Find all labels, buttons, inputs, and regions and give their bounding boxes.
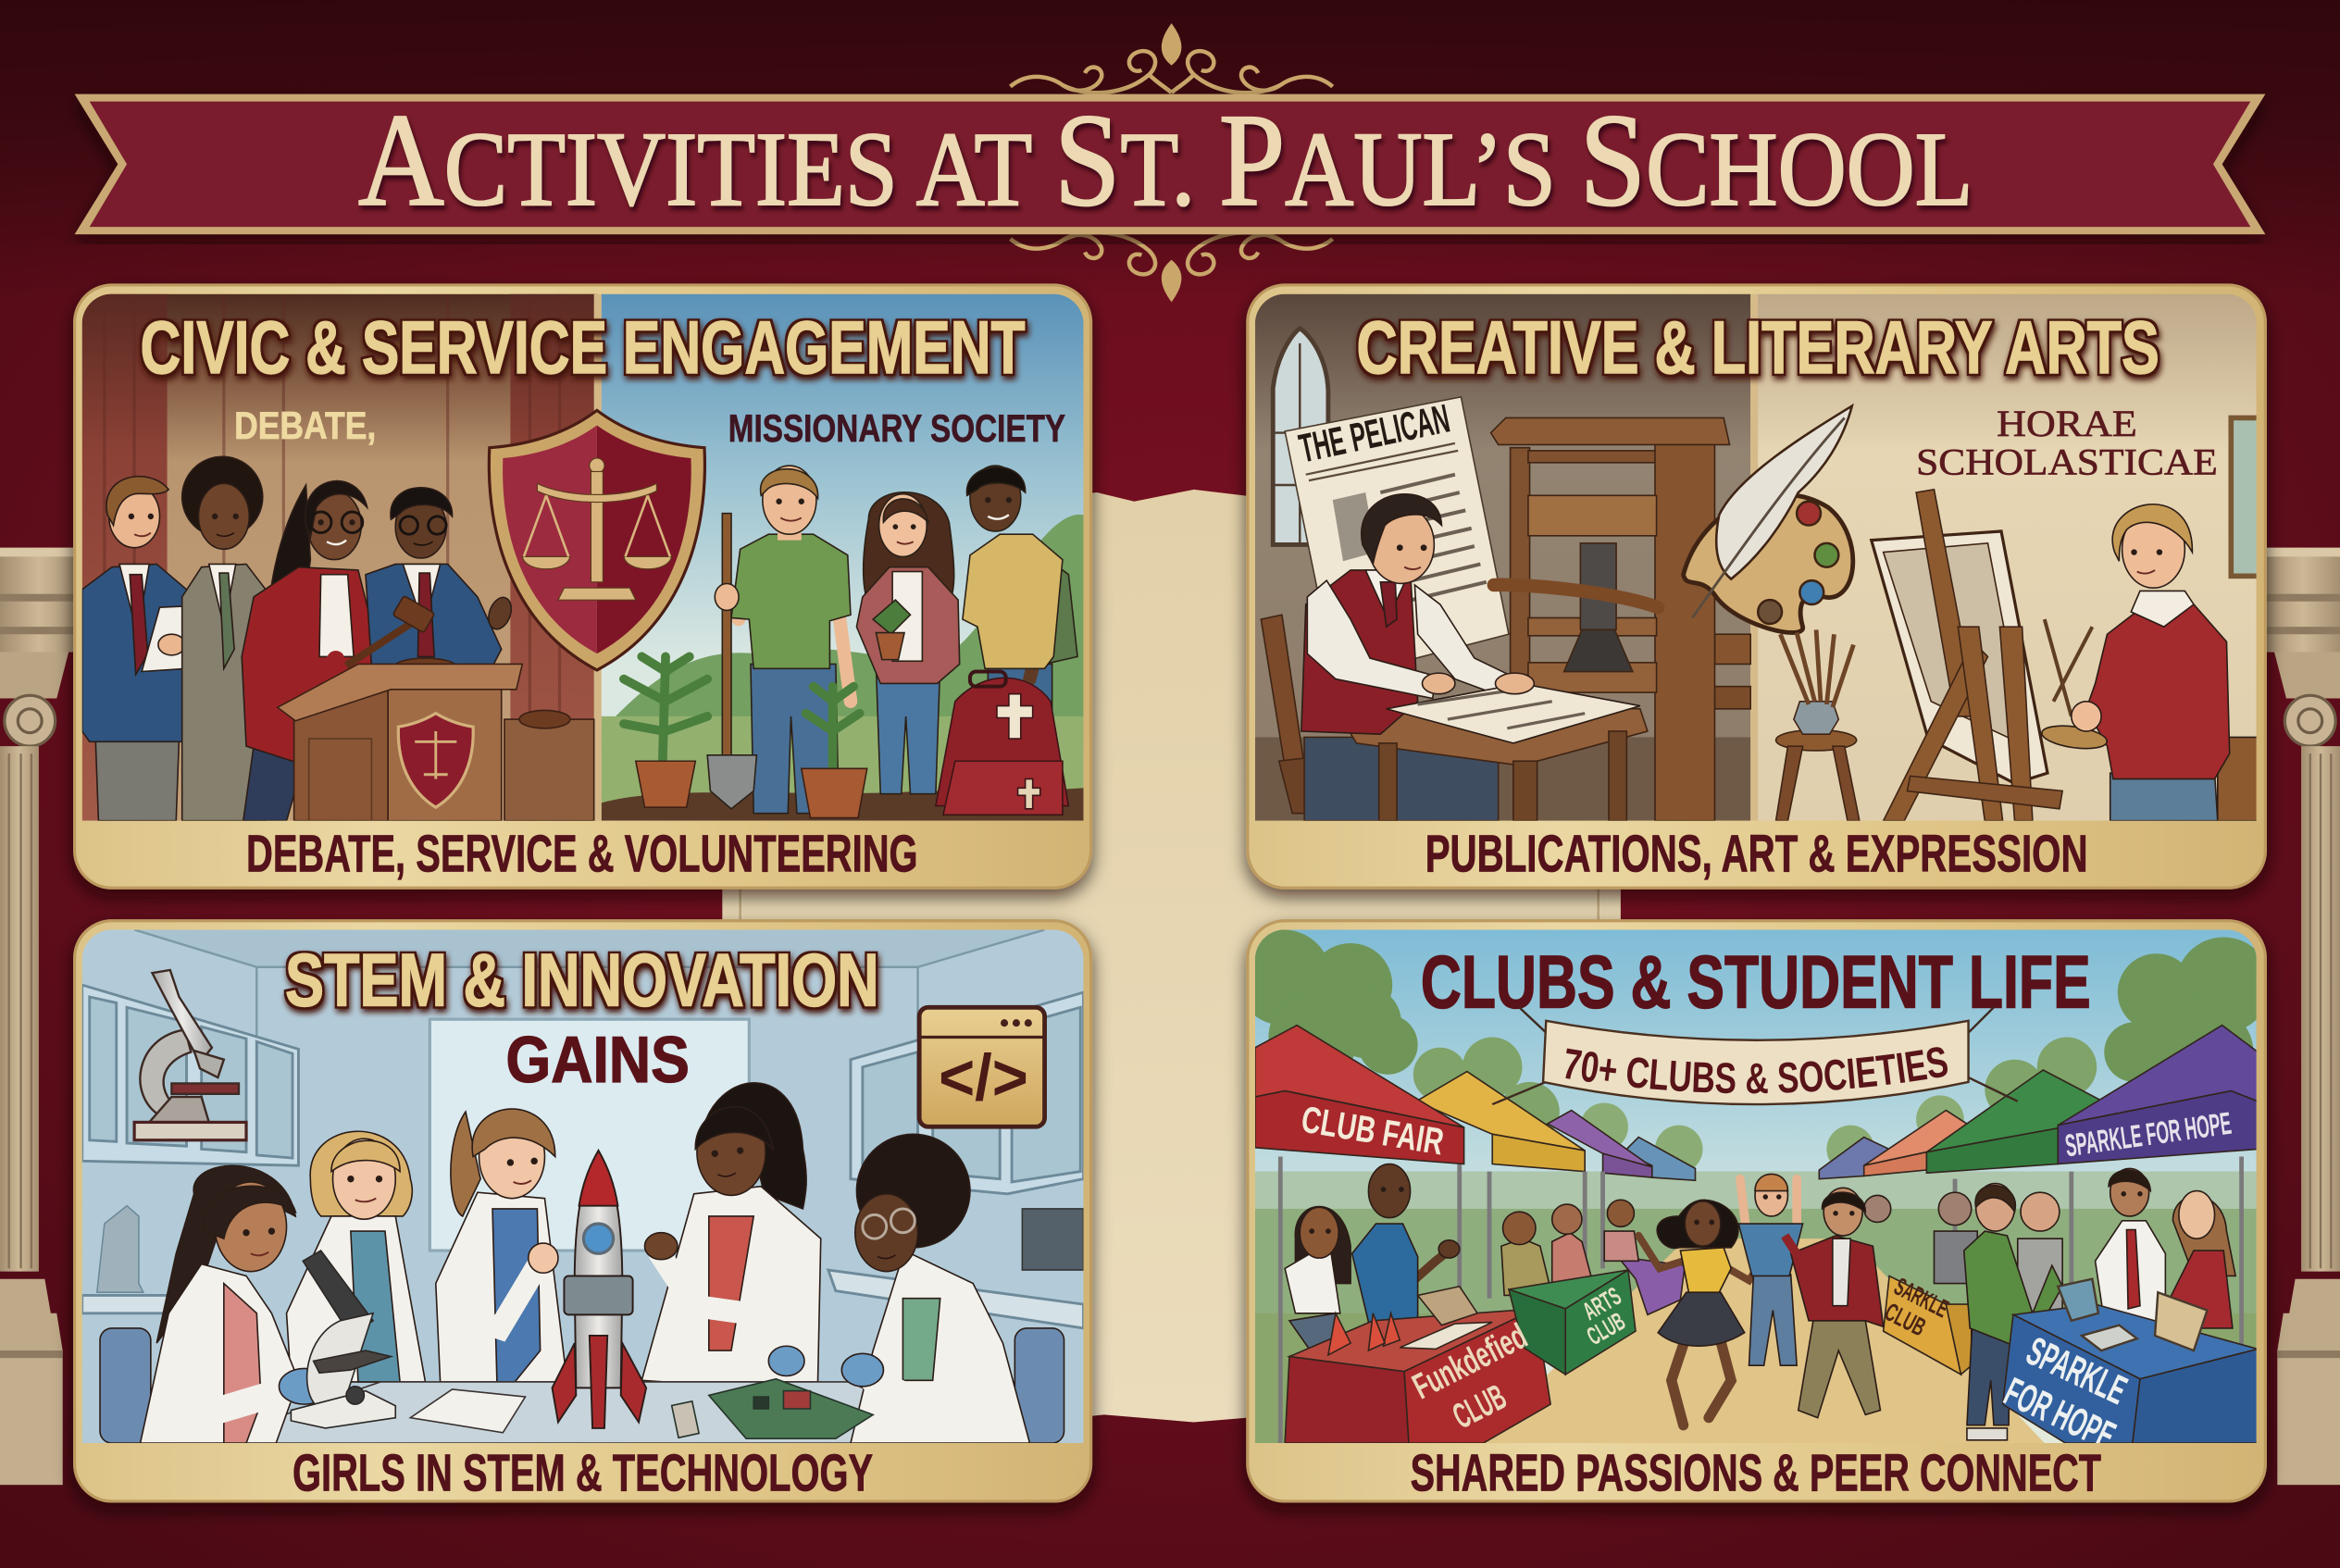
- heading: STEM & INNOVATION: [285, 940, 879, 1023]
- lab table: [202, 1382, 970, 1443]
- panel: clubs and student life: [1233, 913, 2279, 1520]
- desk with chair: [1261, 615, 1648, 821]
- caption strip text: DEBATE, SERVICE & VOLUNTEERING: [246, 825, 918, 883]
- heading: CLUBS & STUDENT LIFE: [1421, 940, 2091, 1024]
- hanging banner: 70+ clubs and societies: [1492, 1007, 2018, 1105]
- person: debater with paper: [81, 476, 187, 821]
- framed painting: [2231, 417, 2261, 576]
- easel with canvas: [1872, 490, 2062, 821]
- person: jumping boy: [1738, 1174, 1803, 1365]
- lectern and gavel: [278, 595, 594, 821]
- background equipment: [97, 1206, 1083, 1292]
- icon: potted plants: [624, 656, 867, 818]
- table: funkdefied club: [1285, 1287, 1550, 1443]
- person: blonde girl: [287, 1131, 425, 1382]
- icon: code window: </>: [939, 1041, 1028, 1114]
- icon: code window: [919, 1007, 1045, 1126]
- left stone column: [0, 548, 78, 1485]
- title text: ACTIVITIES AT ST. PAUL’S SCHOOL: [358, 87, 1973, 234]
- person: student writing: [1301, 494, 1640, 743]
- tent: far tents left: [1416, 1072, 1696, 1180]
- person: girl with microscope: [100, 1165, 330, 1443]
- table: arts club: [1509, 1270, 1636, 1375]
- person: dancing girl: [1638, 1200, 1767, 1425]
- icon: small lectern shield: [398, 714, 473, 807]
- person: fair host man: [1352, 1164, 1460, 1328]
- icon: bench microscope: [291, 1251, 395, 1428]
- person: girl with braids: [641, 1083, 821, 1382]
- person: volunteer in red hoodie: [2170, 1191, 2235, 1328]
- tent: far tents right: [1819, 1070, 2103, 1179]
- art boards on blue table: [2058, 1279, 2208, 1350]
- hanging banner: 70+ clubs and societies: 70+ CLUBS & SOCIETIES: [1565, 1047, 1948, 1094]
- icon: rocket: [553, 1151, 646, 1428]
- person: boy in green hoodie: [1964, 1184, 2062, 1440]
- label: horae scholasticae: [1916, 403, 2218, 483]
- label: arts club: ARTS: [1578, 1281, 1625, 1325]
- person: girl with glasses: [768, 1134, 1064, 1443]
- person: man in maroon blazer: [1785, 1188, 1884, 1418]
- people: booth visitors left: [1501, 1200, 1638, 1295]
- table: sparkle for hope blue: [2003, 1304, 2258, 1443]
- icon: red backpack: [936, 672, 1068, 815]
- stool with brush jar: [1776, 629, 1860, 821]
- heading: CIVIC & SERVICE ENGAGEMENT: [141, 306, 1026, 390]
- person: volunteer with tie: [2096, 1168, 2165, 1321]
- label: sparkle for hope table: SPARKLE: [2020, 1329, 2134, 1413]
- tent poles: [1280, 1156, 2242, 1443]
- newspaper: the pelican: THE PELICAN: [1296, 396, 1453, 472]
- center parchment scroll: [722, 490, 1621, 1422]
- person: speaker in red blazer: [242, 481, 376, 821]
- panel: civic and service engagement: [75, 285, 1091, 888]
- icon: gothic window: [1273, 329, 1328, 544]
- label: funkdefied club: Funkdefied: [1406, 1316, 1534, 1407]
- icon: wall microscope: [134, 970, 246, 1140]
- scene: club fair: [1236, 929, 2272, 1460]
- ornament: bottom flourish: [1010, 232, 1333, 298]
- label: sparkle for hope table: FOR HOPE: [1998, 1370, 2122, 1460]
- icon: circuit board: [672, 1379, 873, 1438]
- person: volunteer in yellow shirt: [963, 466, 1077, 761]
- caption strip text: GIRLS IN STEM & TECHNOLOGY: [292, 1444, 873, 1502]
- trees: [1236, 929, 2272, 1173]
- label: club fair: CLUB FAIR: [1299, 1099, 1447, 1164]
- person: fair host girl: [1285, 1207, 1350, 1350]
- people: booth visitors right: [1864, 1192, 2062, 1321]
- newspaper: the pelican: [1285, 396, 1509, 679]
- person: debater in grey suit: [182, 456, 266, 821]
- label: sarkle club: SARKLE: [1890, 1272, 1953, 1323]
- scene: debate and service: [82, 294, 1083, 821]
- table: purple: [1618, 1257, 1685, 1314]
- scene: science lab: [82, 929, 1083, 1443]
- caption strip text: PUBLICATIONS, ART & EXPRESSION: [1425, 825, 2088, 883]
- panel: creative and literary arts: [1248, 285, 2265, 888]
- tent: club fair red: [1255, 1026, 1464, 1164]
- label: horae scholasticae: SCHOLASTICAE: [1916, 442, 2218, 483]
- label: arts club: CLUB: [1582, 1306, 1630, 1350]
- title banner: [75, 87, 2265, 234]
- label: sarkle club: CLUB: [1880, 1297, 1931, 1341]
- icon: shield with scales: [489, 410, 704, 670]
- person: volunteer with plant: [856, 492, 960, 794]
- label: funkdefied club: CLUB: [1447, 1377, 1512, 1437]
- label: gains: GAINS: [506, 1024, 690, 1097]
- person: volunteer with shovel: [707, 466, 851, 814]
- scene: press and studio: [1255, 294, 2261, 821]
- icon: notepad: [410, 1389, 526, 1433]
- ornament: top flourish: [1010, 27, 1333, 93]
- table: sparkle club yellow: [1884, 1276, 1972, 1375]
- icon: palette and quill: [1684, 406, 1853, 632]
- label: horae scholasticae: HORAE: [1997, 403, 2137, 444]
- tent: sparkle for hope purple: [2058, 1026, 2258, 1164]
- person: girl with ponytail: [436, 1109, 567, 1382]
- label: arts club: [1570, 1281, 1637, 1350]
- label: sarkle club: [1877, 1272, 1953, 1347]
- label: missionary society: MISSIONARY SOCIETY: [728, 406, 1065, 450]
- label: funkdefied club: [1406, 1316, 1554, 1447]
- person: debater with glasses: [365, 487, 513, 664]
- label: sparkle for hope table: [1998, 1328, 2141, 1460]
- person: student painting: [2040, 504, 2258, 821]
- label: debate: DEBATE,: [234, 404, 376, 447]
- lab cabinets: [82, 985, 1083, 1328]
- printing press: [1491, 417, 1750, 821]
- right stone column: [2265, 548, 2340, 1485]
- panel: stem and innovation: [75, 921, 1091, 1502]
